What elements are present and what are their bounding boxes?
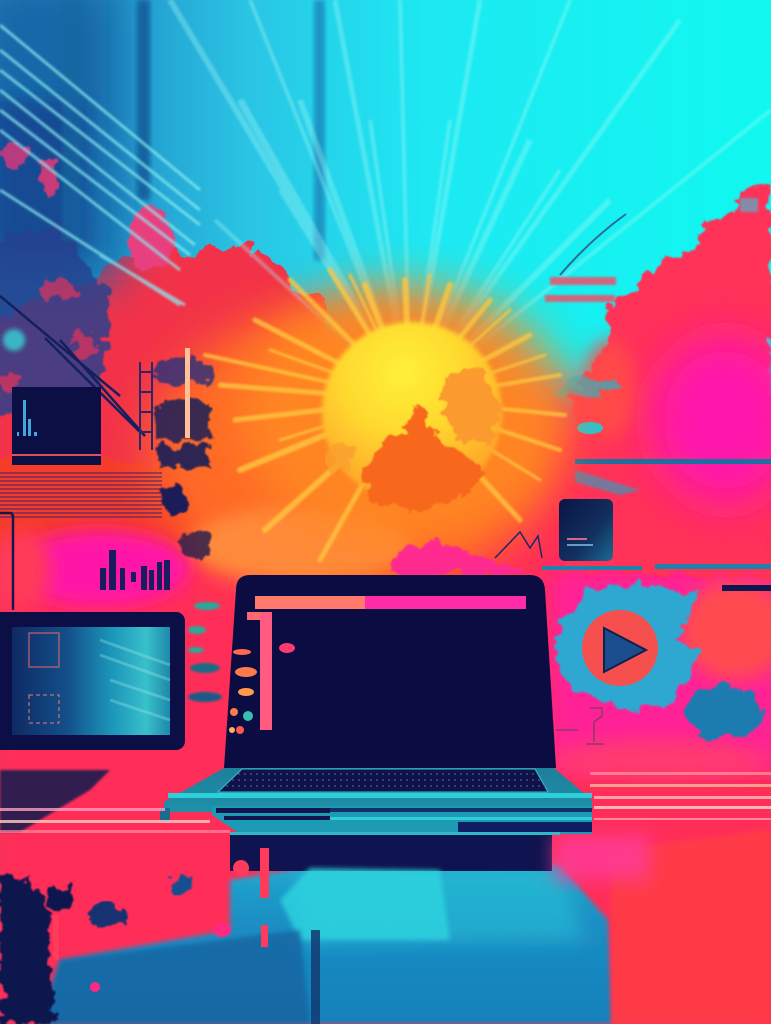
sketch arrow icon	[495, 532, 542, 558]
teal flecks beside tablet	[188, 602, 222, 702]
laptop top pink bar	[255, 596, 526, 609]
play button splash	[556, 583, 763, 739]
laptop lid	[224, 575, 556, 768]
laptop side bar	[247, 612, 272, 730]
pink splash behind laptop	[385, 542, 540, 575]
pale sky rays	[170, 0, 771, 400]
sun rays	[205, 270, 565, 560]
small square tile	[559, 499, 613, 561]
curved thin line upper right	[560, 214, 626, 275]
bar chart silhouette	[100, 550, 170, 590]
laptop reflection and floor	[40, 830, 771, 1024]
dark building shapes left	[0, 296, 212, 563]
tablet	[0, 612, 185, 750]
sketch marks under play button	[556, 708, 604, 744]
play button	[582, 610, 658, 686]
diagonal light lines, top left	[0, 25, 200, 305]
left edge device frame	[0, 513, 13, 610]
laptop	[160, 575, 592, 835]
horizontal light streaks	[0, 772, 771, 833]
red-pink splash right	[542, 185, 771, 591]
sun disc	[322, 322, 502, 513]
small dark chart tile	[12, 387, 101, 465]
laptop deck	[160, 768, 592, 835]
dark splatter bottom left	[0, 875, 231, 1024]
dark panel lower left	[0, 770, 110, 832]
lower accent drips	[53, 848, 269, 960]
laptop screen dots	[229, 643, 295, 734]
top-left dark haze	[0, 0, 325, 420]
mid-section colour wash	[0, 250, 771, 1024]
sun glow	[240, 285, 570, 545]
